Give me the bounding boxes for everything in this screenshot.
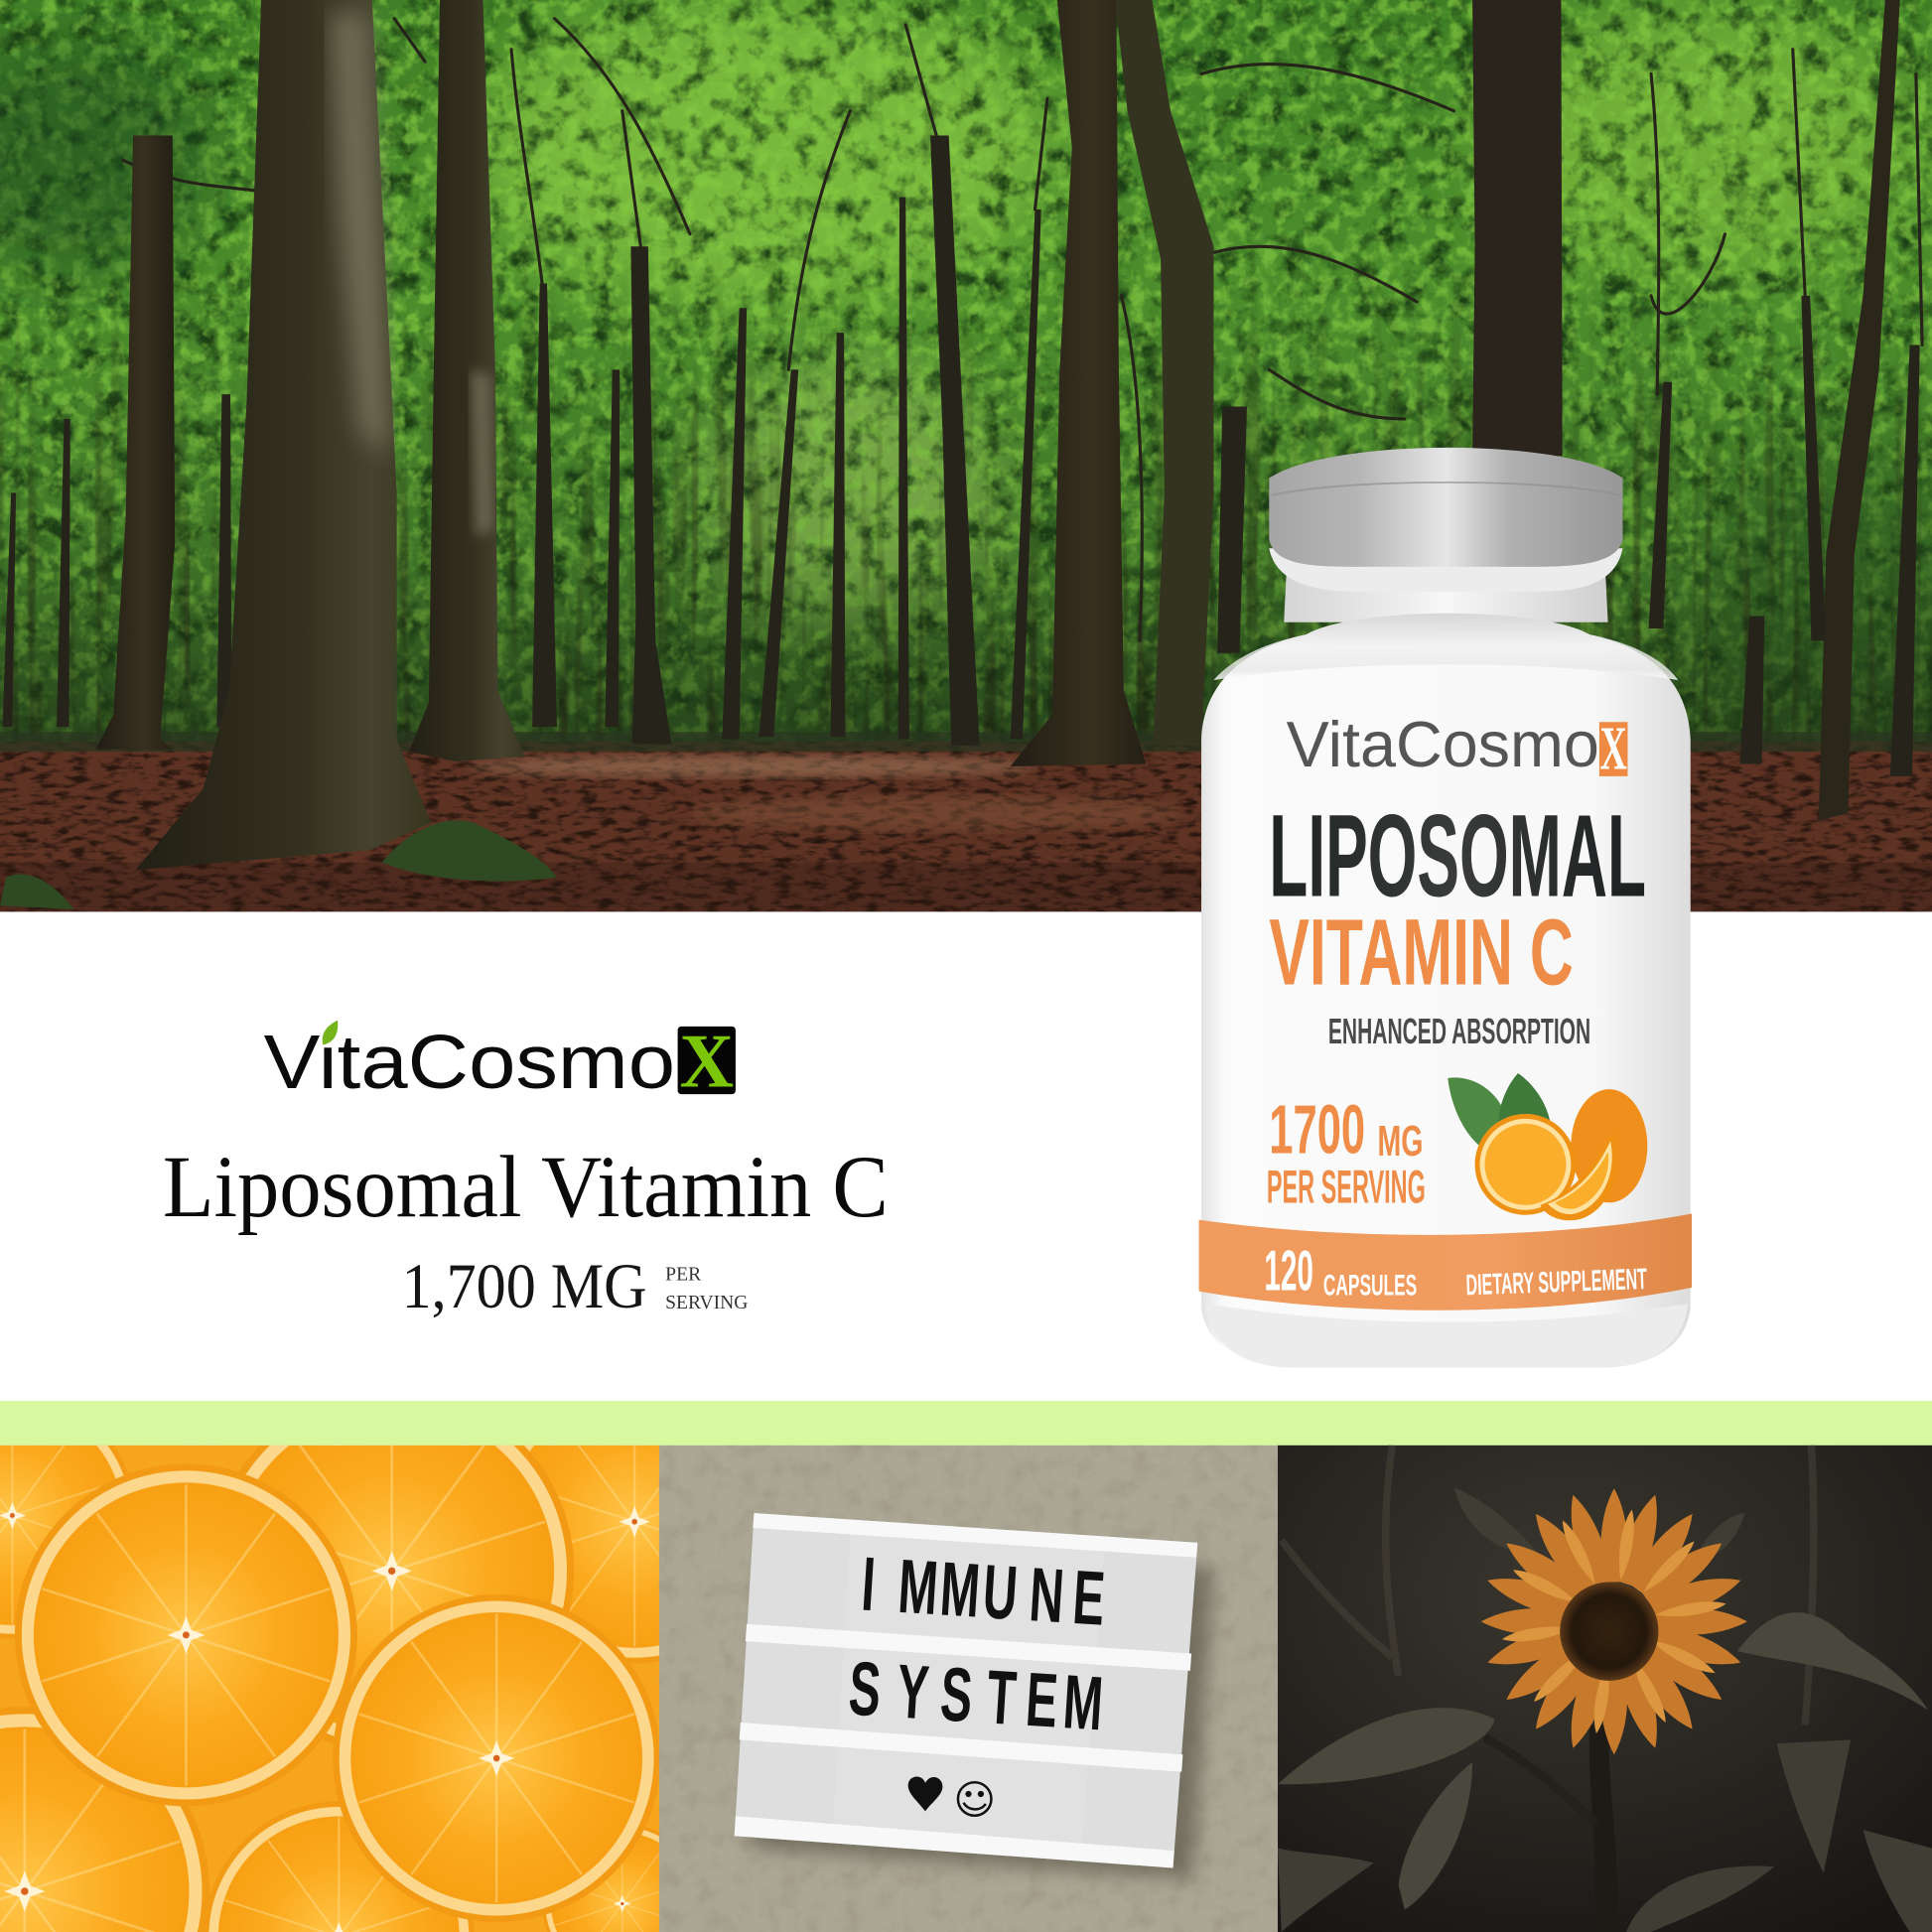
background thin trees	[2, 136, 1920, 776]
tree: right trunk	[1819, 0, 1900, 821]
forest grass details	[0, 820, 557, 909]
logo leaf	[323, 1021, 338, 1044]
forest photo background	[0, 0, 1932, 911]
icon: heart	[908, 1777, 942, 1811]
sunflower background streaks	[1282, 1446, 1814, 1725]
photo: orange slices	[0, 1446, 659, 1932]
logo X badge: X	[679, 1019, 734, 1104]
label: capsules: CAPSULES	[1323, 1269, 1417, 1302]
forest floor	[0, 732, 1932, 911]
label logo: X	[1600, 715, 1627, 782]
label logo: VitaCosmo	[1287, 709, 1599, 780]
label: vitamin c: VITAMIN C	[1269, 900, 1574, 1005]
green band	[0, 1401, 1932, 1446]
tree: left mid trunk	[96, 136, 175, 750]
branches	[123, 19, 1922, 640]
lightbox text: immune: IMMUNE	[859, 1541, 1107, 1641]
tree: second trunk	[409, 0, 525, 761]
brand logo: VitaCosmo	[264, 1020, 675, 1105]
orange band	[1199, 1213, 1692, 1311]
sunflower centre	[1560, 1583, 1658, 1681]
product bottle: PER SERVING	[1267, 1160, 1426, 1212]
white panel	[0, 911, 1932, 1401]
lightbox text: system: SYSTEM	[847, 1645, 1105, 1746]
bottle cap	[1269, 448, 1622, 592]
sunflower stem	[1589, 1725, 1617, 1932]
label: mg: MG	[1378, 1118, 1423, 1166]
icon: smiley	[958, 1782, 991, 1816]
per serving: PER	[665, 1263, 702, 1285]
label: 120: 120	[1264, 1239, 1313, 1303]
tree: right centre trunk	[1115, 0, 1213, 742]
lightbox board	[735, 1513, 1197, 1867]
label: dietary supplement: DIETARY SUPPLEMENT	[1465, 1263, 1647, 1302]
dosage: 1,700 MG	[402, 1250, 647, 1321]
per serving	[665, 1263, 748, 1313]
bottle body	[1201, 614, 1691, 1368]
label: enhanced absorption: ENHANCED ABSORPTION	[1328, 1011, 1590, 1051]
tree: centre trunk	[1011, 0, 1146, 766]
heading: Liposomal Vitamin C	[163, 1138, 889, 1236]
orange illustration	[1448, 1073, 1647, 1231]
sunflower petals	[1481, 1488, 1747, 1754]
product bottle	[1199, 448, 1692, 1368]
sunflower leaves	[1278, 1487, 1932, 1932]
per serving: SERVING	[665, 1292, 748, 1313]
label: 1700: 1700	[1269, 1091, 1365, 1169]
tree: dark trunk behind bottle	[1472, 0, 1563, 456]
bottle neck	[1284, 548, 1608, 622]
bottle base shading	[1205, 1304, 1688, 1368]
tree: large foreground trunk	[136, 0, 431, 870]
bottle shoulder shading	[1213, 614, 1678, 680]
photo: immune system lightbox	[659, 1446, 1278, 1932]
photo: sunflower	[1278, 1446, 1932, 1932]
